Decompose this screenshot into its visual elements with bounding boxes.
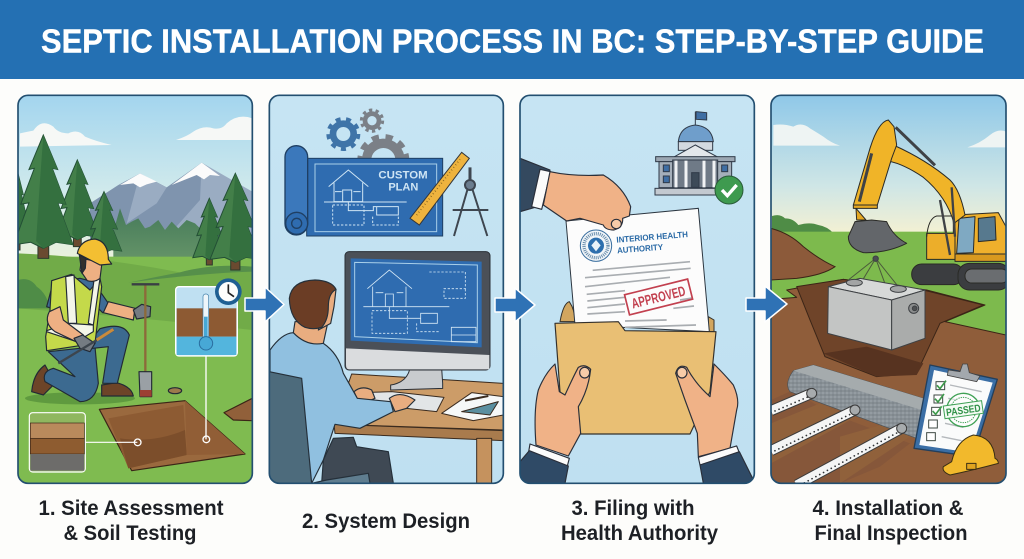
- panel: site assessment and soil testing: [7, 95, 261, 483]
- title banner: [0, 0, 1024, 79]
- manila folder: [555, 322, 716, 434]
- arrow: step 1 to step 2: [245, 287, 284, 322]
- label: step 3: 3. Filing with: [572, 497, 694, 520]
- authority seal: [580, 230, 612, 261]
- perforated drain pipes: [771, 388, 907, 487]
- icon: government building: [655, 112, 735, 195]
- blueprint: custom plan: [285, 146, 443, 236]
- hydraulic cylinders: [859, 127, 955, 255]
- septic tank on ropes: [828, 256, 925, 350]
- approved document: AUTHORITY: [617, 242, 664, 255]
- label: step 1: & Soil Testing: [64, 522, 196, 545]
- label: step 3: Health Authority: [561, 522, 718, 545]
- soil layers inset: [29, 413, 141, 472]
- panel: system design: [269, 95, 503, 485]
- approved stamp: [625, 279, 693, 315]
- arrow: step 2 to step 3: [495, 288, 535, 322]
- approved stamp: APPROVED: [630, 283, 687, 311]
- label: step 2: 2. System Design: [302, 510, 470, 533]
- water table inset: [176, 287, 237, 443]
- gravel bed: [788, 365, 923, 438]
- icon: compass: [453, 167, 488, 236]
- icon: yellow hard hat: [943, 435, 998, 475]
- approved document: INTERIOR HEALTH: [616, 229, 688, 245]
- icon: green check badge: [715, 176, 743, 204]
- desk with keyboard and drawings: [334, 374, 503, 485]
- arrow: step 3 to step 4: [746, 286, 787, 322]
- icon: ruler: [410, 152, 469, 225]
- label: step 1: 1. Site Assessment: [38, 497, 224, 520]
- blueprint: custom plan: CUSTOM: [378, 170, 428, 182]
- inspection clipboard: PASSED: [946, 403, 982, 419]
- soil test pit: [99, 398, 252, 471]
- label: step 4: 4. Installation &: [812, 497, 964, 520]
- blueprint: custom plan: PLAN: [388, 182, 418, 194]
- approved document: [566, 208, 709, 332]
- inspection clipboard: [914, 364, 997, 457]
- panel: filing with health authority: [520, 95, 754, 483]
- computer monitor: [345, 252, 490, 390]
- excavated trench and soil: [771, 279, 1006, 483]
- folder back: [560, 302, 714, 332]
- label: step 4: Final Inspection: [814, 522, 968, 545]
- excavator: [848, 120, 1010, 290]
- worker with shovel: [32, 239, 182, 402]
- designer at computer: [269, 280, 415, 483]
- hands holding folder: [520, 364, 753, 483]
- icon: clock: [215, 278, 242, 305]
- hand holding document: [520, 158, 631, 230]
- panel: installation and final inspection: [771, 95, 1010, 487]
- gears: [326, 108, 410, 158]
